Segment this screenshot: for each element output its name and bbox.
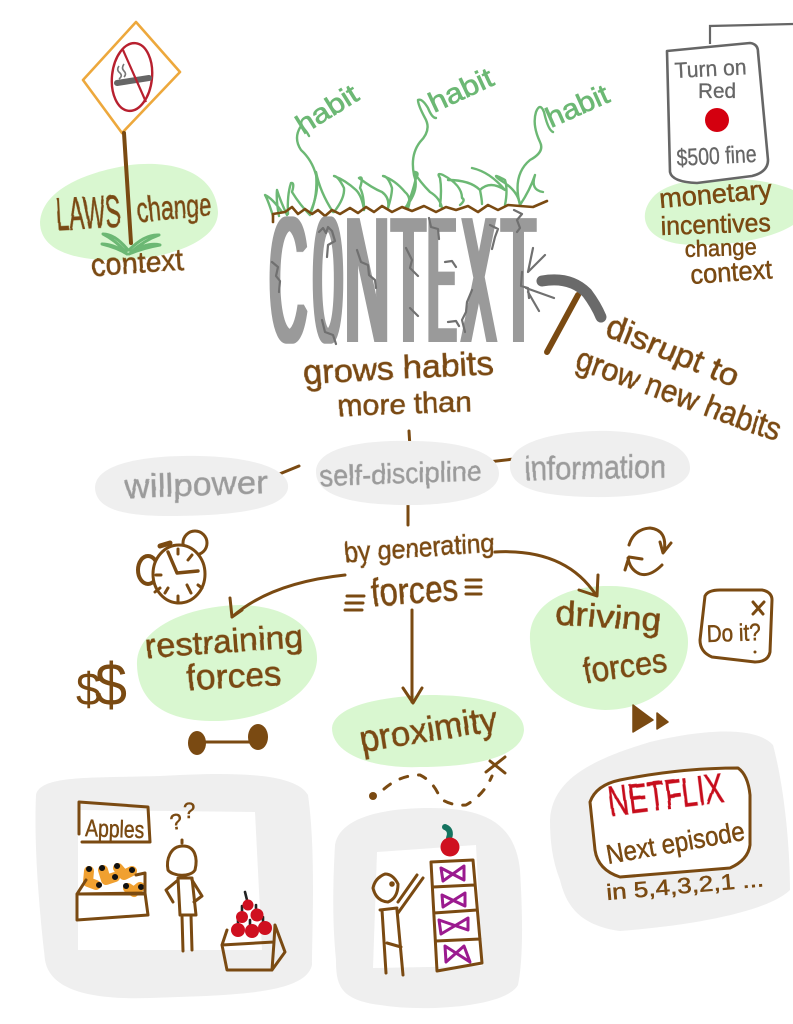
icon: hammer disrupting context xyxy=(526,248,601,352)
text: restraining: restraining xyxy=(144,617,304,665)
panel: information xyxy=(510,431,690,497)
panel: habits growing out of context xyxy=(265,62,614,381)
icon: thinking person xyxy=(166,840,202,951)
title: CONTEXT: C xyxy=(270,180,306,381)
text: forces center: forces xyxy=(370,567,459,615)
title: CONTEXT: E xyxy=(428,179,456,381)
icon: barbell xyxy=(188,724,268,755)
icon: traffic sign xyxy=(667,43,768,183)
arrow: to restraining forces xyxy=(230,575,345,617)
panel: proximity xyxy=(332,695,524,767)
text: NETFLIX: NETFLIX xyxy=(605,764,726,825)
text: Apples: Apples xyxy=(85,815,145,844)
green blob: monetary xyxy=(645,178,793,245)
icon: dollar signs xyxy=(76,651,127,718)
icon: netflix screen xyxy=(590,768,750,877)
text: countdown: in 5,4,3,2,1 ... xyxy=(605,866,765,905)
icon: Do it box xyxy=(700,590,772,662)
text: Red: Red xyxy=(698,80,736,103)
panel: willpower xyxy=(95,456,288,516)
icon: question marks: ? xyxy=(168,808,184,835)
habit sprout 3 xyxy=(518,78,614,205)
panel: netflix scene xyxy=(550,731,790,931)
icon: dollar signs: $ xyxy=(95,651,127,718)
panel: restraining forces xyxy=(137,605,317,721)
green blob: driving xyxy=(530,586,688,710)
icon: question marks: ? xyxy=(183,798,195,823)
text: Turn on: Turn on xyxy=(674,54,747,83)
panel: driving forces xyxy=(530,586,688,710)
panel: laws change context xyxy=(40,22,218,283)
green blob: laws xyxy=(40,164,218,260)
icon: reaching person xyxy=(373,874,423,975)
icon: red apple pile xyxy=(231,892,272,938)
icon: question marks xyxy=(168,798,195,835)
habit sprout 2 xyxy=(405,62,498,208)
grey blob: information xyxy=(510,431,690,497)
text: grows habits: grows habits xyxy=(302,344,494,391)
grey frame: apple scene xyxy=(35,774,313,998)
icon: apple on shelf xyxy=(440,827,460,856)
icon: orange crate xyxy=(77,866,148,920)
title: CONTEXT: O xyxy=(314,180,342,381)
icon: red light xyxy=(705,108,729,132)
arrow: to proximity xyxy=(403,610,422,703)
text: Do it?: Do it? xyxy=(706,619,761,648)
text: context: context xyxy=(90,242,185,283)
panel: self-discipline xyxy=(316,441,499,505)
title: CONTEXT: N xyxy=(345,180,389,381)
text: habit 3: habit xyxy=(541,78,614,133)
text: driving: driving xyxy=(555,594,663,638)
title: CONTEXT: T xyxy=(502,181,535,381)
green blob: restraining xyxy=(137,605,317,721)
text: change: change xyxy=(135,186,212,230)
title: CONTEXT: X xyxy=(462,180,496,381)
icon: grass tuft xyxy=(102,234,160,254)
arrow: to driving forces xyxy=(495,552,598,596)
text: forces: forces xyxy=(581,642,669,691)
text: by generating: by generating xyxy=(343,527,495,568)
habit sprout 1 xyxy=(290,78,364,213)
soil line xyxy=(273,201,547,222)
icon: no smoking sign xyxy=(83,22,180,133)
icon: alarm clock xyxy=(138,531,207,603)
grey blob: willpower xyxy=(95,456,288,516)
icon: apples sign xyxy=(79,802,150,844)
cracks in letters xyxy=(272,210,529,344)
text: context: context xyxy=(689,254,774,290)
grey blob: self-discipline xyxy=(316,441,499,505)
title: CONTEXT: T xyxy=(392,181,425,381)
text: willpower: willpower xyxy=(123,463,268,505)
icon: sign pole xyxy=(124,133,131,243)
icon: shelf with bow ties xyxy=(431,860,482,971)
title: CONTEXT xyxy=(270,179,535,381)
text: $500 fine: $500 fine xyxy=(676,141,757,172)
icon: fast forward triangles xyxy=(633,705,668,732)
icon: traffic sign wire xyxy=(710,24,793,44)
text: habit 1: habit xyxy=(290,78,364,140)
green blob: proximity xyxy=(332,695,524,767)
text: proximity: proximity xyxy=(357,698,500,760)
text: habit 2: habit xyxy=(423,62,498,118)
grey frame: netflix scene xyxy=(550,731,790,931)
text: forces: forces xyxy=(185,654,282,698)
text: LAWS: LAWS xyxy=(55,186,121,240)
text: incentives: incentives xyxy=(660,207,771,241)
connector ticks xyxy=(277,431,514,525)
text: information: information xyxy=(524,448,666,487)
panel: bookshelf scene xyxy=(333,808,522,1008)
panel: apple scene xyxy=(35,774,313,998)
text: monetary: monetary xyxy=(658,174,774,214)
grey frame: bookshelf scene xyxy=(333,808,522,1008)
text: self-discipline: self-discipline xyxy=(319,455,482,493)
text: disrupt to: disrupt to xyxy=(601,308,745,394)
icon: dollar signs: $ xyxy=(76,663,101,715)
grass blades xyxy=(265,168,543,216)
text: more than: more than xyxy=(337,385,472,423)
icon: dashed path to X xyxy=(369,757,505,805)
icon: red apple crate xyxy=(222,925,285,970)
icon: refresh arrows xyxy=(625,528,671,575)
panel: monetary incentives xyxy=(645,24,793,290)
text: Next episode: Next episode xyxy=(604,816,747,870)
text: change: change xyxy=(684,234,757,262)
